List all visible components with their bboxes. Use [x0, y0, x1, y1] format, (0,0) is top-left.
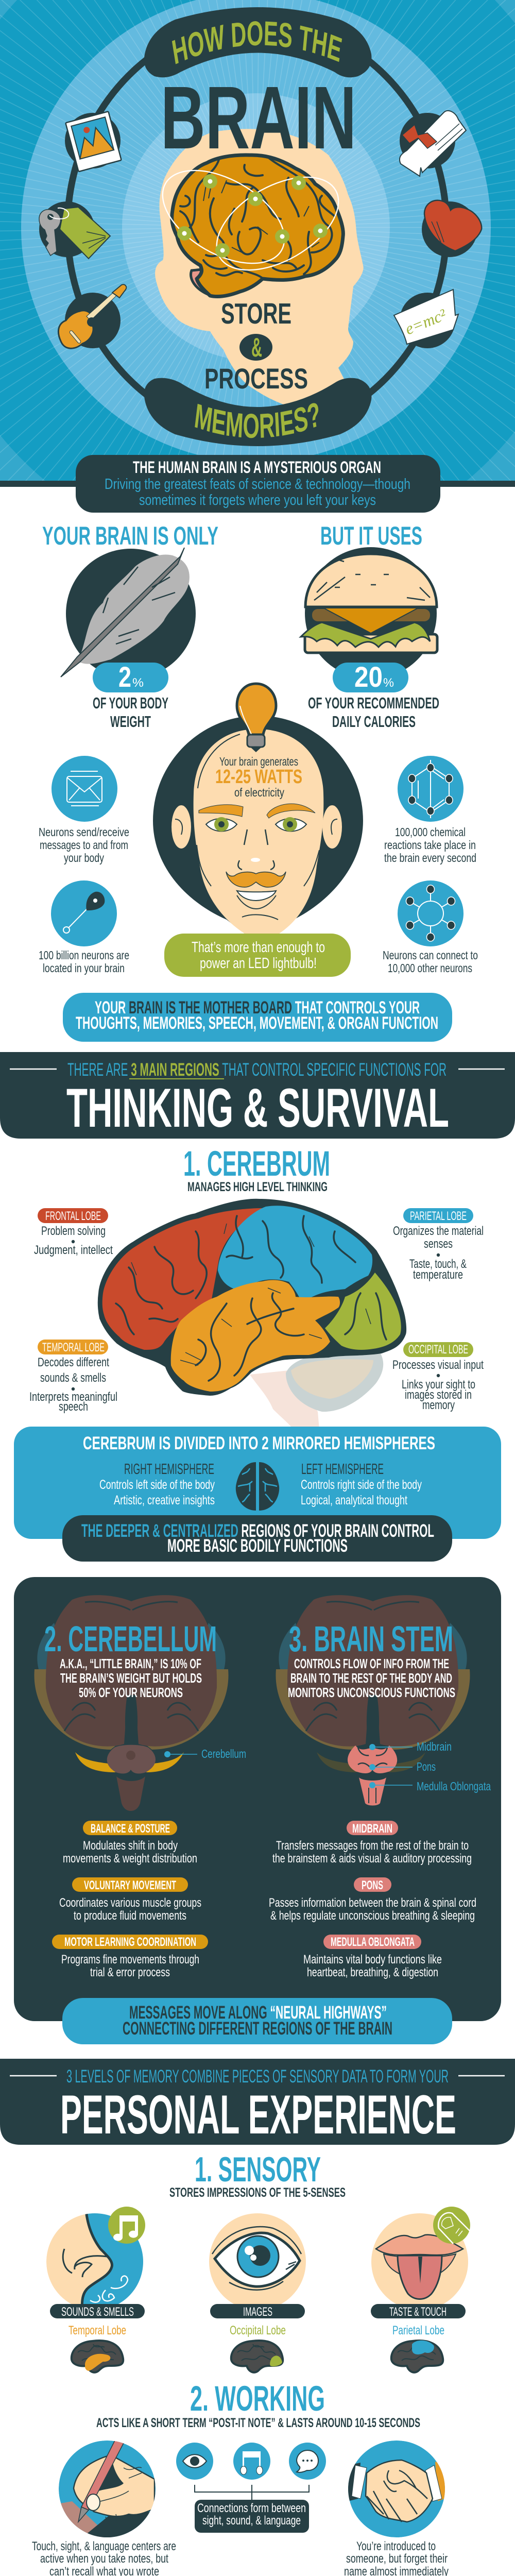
- stat: 20 percent: DAILY CALORIES: [332, 713, 416, 731]
- lobe note: parietal: Taste, touch, &: [409, 1257, 467, 1271]
- label: images: [210, 2304, 305, 2318]
- caption: introductions: [344, 2539, 449, 2576]
- badge: music note: [108, 2207, 145, 2244]
- heading: sensory: 1. SENSORY: [195, 2150, 321, 2189]
- callout: deeper regions: MORE BASIC BODILY FUNCTIONS: [167, 1536, 348, 1556]
- lobe note: temporal: [29, 1340, 117, 1414]
- fact: 100 billion neurons: 100 billion neurons are: [39, 948, 129, 962]
- function: pons: [269, 1877, 476, 1923]
- right hemisphere text: Controls left side of the body: [99, 1478, 215, 1492]
- function: balance and posture: BALANCE & POSTURE: [91, 1822, 170, 1836]
- fact: neurons send messages: Neurons send/receive: [39, 825, 129, 839]
- icon: speech bubble: [289, 2443, 326, 2480]
- lobe note: parietal: temperature: [413, 1268, 463, 1282]
- function: motor learning coordination: trial & error process: [90, 1965, 170, 1979]
- function: motor learning coordination: MOTOR LEARNING COORDINATION: [64, 1935, 196, 1949]
- cerebellum description: THE BRAIN’S WEIGHT BUT HOLDS: [60, 1670, 202, 1686]
- heading: cerebellum: 2. CEREBELLUM: [44, 1619, 217, 1659]
- panel: cerebellum and brain stem: [14, 1577, 501, 2021]
- caption: introductions: You’re introduced to: [356, 2539, 436, 2553]
- callout: mother board: [63, 993, 452, 1042]
- title: process: PROCESS: [204, 362, 308, 395]
- box: connections: sight, sound, & language: [202, 2514, 301, 2528]
- function: medulla oblongata: MEDULLA OBLONGATA: [331, 1935, 415, 1949]
- sense: sounds and smells: [46, 2207, 154, 2372]
- function: motor learning coordination: [52, 1935, 208, 1979]
- illustration: rear brain with brain stem: [276, 1595, 470, 1805]
- lobe note: temporal: Interprets meaningful: [29, 1390, 117, 1404]
- label: sounds and smells: [50, 2304, 145, 2318]
- hero background with rays: [0, 0, 515, 487]
- left hemisphere text: [301, 1461, 422, 1507]
- lobe note: parietal: Organizes the material: [393, 1224, 484, 1238]
- title: brain: BRAIN: [161, 67, 356, 167]
- title: store: STORE: [221, 297, 291, 330]
- sounds and smells text: SOUNDS & SMELLS: [61, 2305, 134, 2319]
- fact: chemical reactions: 100,000 chemical: [395, 825, 466, 839]
- left hemisphere text: Controls right side of the body: [301, 1478, 422, 1492]
- mustache: [226, 872, 286, 887]
- fact: 100 billion neurons: located in your brain: [43, 961, 125, 975]
- occipital lobe caption: Occipital Lobe: [230, 2324, 286, 2337]
- lobe folds: [116, 1216, 386, 1381]
- heading: working: [96, 2379, 420, 2430]
- temporal lobe: [171, 1280, 340, 1392]
- cerebellum description: [60, 1656, 202, 1700]
- labels: midbrain, pons, medulla: [369, 1740, 491, 1793]
- icon: eye: [176, 2443, 213, 2480]
- fact: 100 billion neurons: [39, 880, 129, 975]
- lobe note: parietal: [393, 1208, 484, 1282]
- function: motor learning coordination: Programs fine movements through: [61, 1953, 199, 1967]
- occipital lobe: [325, 1273, 401, 1350]
- heading: working: 2. WORKING: [190, 2379, 325, 2418]
- icon: feather: [61, 548, 196, 679]
- panel: hemispheres: [14, 1427, 501, 1539]
- eyes: [206, 817, 306, 832]
- function: voluntary movement: to produce fluid movements: [74, 1909, 186, 1923]
- mini brain: parietal: [391, 2341, 443, 2372]
- caption: note taking: Touch, sight, & language centers are: [32, 2539, 176, 2553]
- lobe note: temporal: TEMPORAL LOBE: [42, 1341, 105, 1354]
- right hemisphere text: RIGHT HEMISPHERE: [124, 1461, 214, 1478]
- title: memories: [195, 403, 318, 438]
- caption: note taking: [32, 2539, 176, 2576]
- lobe note: frontal: [34, 1208, 113, 1257]
- right hemisphere text: Artistic, creative insights: [114, 1493, 215, 1507]
- main brain illustration: [147, 151, 354, 297]
- icon: brain top view: [236, 1462, 279, 1511]
- watts text: of electricity: [234, 786, 284, 799]
- labels: midbrain, pons, medulla: Medulla Oblongata: [417, 1780, 491, 1793]
- badge: fingertip: [433, 2207, 470, 2244]
- callout: LED lightbulb: power an LED lightbulb!: [200, 955, 317, 972]
- function: balance and posture: movements & weight distribution: [63, 1852, 197, 1866]
- callout: deeper regions: [62, 1515, 452, 1562]
- left hemisphere text: LEFT HEMISPHERE: [301, 1461, 384, 1478]
- illustration: man with lightbulb: [153, 684, 363, 934]
- faded cerebellum and stem: [250, 1370, 319, 1430]
- brain stem description: [288, 1656, 455, 1700]
- fact: chemical reactions: [384, 756, 476, 865]
- section banner: personal experience: [0, 2059, 515, 2145]
- banner subtitle: sometimes it forgets where you left your keys: [139, 492, 376, 509]
- icon: diploma: [400, 111, 466, 176]
- label: cerebellum: Cerebellum: [201, 1747, 246, 1760]
- label: taste and touch: [371, 2304, 466, 2318]
- brain outline: [100, 1201, 404, 1393]
- caption: introductions: someone, but forget their: [346, 2552, 448, 2566]
- lobe note: frontal: Judgment, intellect: [34, 1243, 113, 1257]
- heading: cerebrum: MANAGES HIGH LEVEL THINKING: [187, 1180, 328, 1194]
- lobe note: occipital: OCCIPITAL LOBE: [408, 1343, 468, 1357]
- illustration: handshake: [348, 2441, 447, 2537]
- icon: equation paper: e=mc²: [402, 305, 450, 338]
- callout: LED lightbulb: [164, 934, 351, 977]
- illustration: rear brain with cerebellum: [34, 1595, 229, 1811]
- parietal lobe caption: Parietal Lobe: [392, 2324, 444, 2337]
- box: connections: [195, 2500, 309, 2533]
- fact: neuron connections: [383, 880, 478, 975]
- lobe note: parietal: senses: [424, 1237, 453, 1251]
- network nodes: [177, 174, 328, 258]
- heading: your brain is only: YOUR BRAIN IS ONLY: [42, 521, 218, 550]
- lobe note: temporal: sounds & smells: [40, 1371, 106, 1385]
- left hemisphere text: Logical, analytical thought: [301, 1493, 407, 1507]
- mini brain: occipital: [231, 2341, 283, 2372]
- illustration: colored brain lobes: [100, 1201, 404, 1430]
- lobe note: parietal: PARIETAL LOBE: [410, 1209, 467, 1223]
- lobe note: occipital: images stored in: [405, 1388, 472, 1402]
- banner subtitle: Driving the greatest feats of science & technology—though: [105, 476, 410, 493]
- stat: 2 percent: OF YOUR BODY: [93, 694, 168, 712]
- ampersand badge: [239, 333, 272, 363]
- watts text: [215, 755, 302, 799]
- lightbulb: [237, 684, 276, 752]
- heading: cerebrum: 1. CEREBRUM: [183, 1144, 330, 1183]
- stat: 20 percent: OF YOUR RECOMMENDED: [308, 694, 439, 712]
- heading: sensory: STORES IMPRESSIONS OF THE 5-SENSES: [169, 2185, 346, 2200]
- icon: key and tag: [39, 201, 110, 259]
- heading: but it uses: BUT IT USES: [320, 521, 422, 550]
- lobe note: occipital: Links your sight to: [402, 1378, 475, 1392]
- icon: photo: [65, 111, 122, 172]
- fact: neurons send messages: your body: [64, 851, 104, 865]
- taste and touch text: TASTE & TOUCH: [389, 2305, 447, 2319]
- cerebellum description: 50% OF YOUR NEURONS: [79, 1685, 183, 1700]
- heading: sensory: [169, 2150, 346, 2200]
- stat: 20 percent: 20: [354, 660, 383, 693]
- label: cerebellum: [164, 1747, 246, 1760]
- right hemisphere text: [99, 1461, 215, 1507]
- illustration: hand taking notes: [59, 2441, 156, 2537]
- function: voluntary movement: Coordinates various muscle groups: [59, 1896, 201, 1910]
- function: balance and posture: [63, 1821, 197, 1866]
- function: midbrain: MIDBRAIN: [352, 1822, 392, 1836]
- eyebrows: [199, 804, 315, 818]
- sense: images: [209, 2213, 306, 2372]
- stat: 2 percent: 2: [118, 660, 131, 693]
- neural network ellipses: [147, 151, 354, 289]
- parietal lobe: [218, 1206, 372, 1303]
- labels: midbrain, pons, medulla: Midbrain: [417, 1740, 452, 1753]
- bracket: [195, 2485, 309, 2500]
- function: balance and posture: Modulates shift in body: [83, 1839, 178, 1853]
- watts text: 12-25 WATTS: [215, 766, 302, 788]
- column: brain stem: [269, 1595, 491, 1979]
- temporal lobe caption: Temporal Lobe: [68, 2324, 126, 2337]
- intro banner: [76, 455, 440, 513]
- sense: taste and touch: [371, 2207, 470, 2372]
- function: voluntary movement: VOLUNTARY MOVEMENT: [84, 1878, 176, 1892]
- lobe note: occipital: [392, 1342, 484, 1412]
- fact: neuron connections: 10,000 other neurons: [388, 961, 472, 975]
- column: cerebellum: [34, 1595, 246, 1979]
- lobe note: occipital: memory: [422, 1398, 455, 1412]
- heading: cerebrum: [183, 1144, 330, 1194]
- title: how does the: HOW DOES THE: [172, 21, 342, 64]
- function: medulla oblongata: [303, 1935, 442, 1979]
- icon: burger: [301, 547, 437, 679]
- title: memories: MEMORIES?: [195, 403, 318, 438]
- callout: mother board: YOUR BRAIN IS THE MOTHER BOARD THAT CONTROLS YOUR: [95, 998, 420, 1018]
- callout: neural highways: [62, 1998, 452, 2044]
- watts text: Your brain generates: [219, 755, 298, 768]
- function: midbrain: [272, 1821, 472, 1866]
- fact: neuron connections: Neurons can connect to: [383, 948, 478, 962]
- function: medulla oblongata: heartbeat, breathing, & digestion: [307, 1965, 438, 1979]
- section banner: thinking and survival: [0, 1052, 515, 1139]
- function: medulla oblongata: Maintains vital body functions like: [303, 1953, 442, 1967]
- function: voluntary movement: [59, 1877, 201, 1923]
- icon: heart: [422, 200, 482, 257]
- stat: 2 percent: %: [132, 676, 144, 690]
- banner heading: THE HUMAN BRAIN IS A MYSTERIOUS ORGAN: [133, 458, 381, 477]
- lobe note: temporal: speech: [59, 1400, 88, 1414]
- callout: LED lightbulb: That’s more than enough to: [192, 939, 325, 956]
- lobe note: frontal: Problem solving: [41, 1224, 106, 1238]
- images text: IMAGES: [243, 2305, 272, 2319]
- lobe note: occipital: Processes visual input: [392, 1358, 484, 1372]
- labels: midbrain, pons, medulla: Pons: [417, 1760, 436, 1773]
- stat: 2 percent: [93, 660, 168, 731]
- mini brain: temporal: [72, 2341, 123, 2372]
- fact: neurons send messages: [39, 756, 129, 865]
- lobe note: temporal: Decodes different: [38, 1355, 109, 1369]
- top title plate: [144, 7, 371, 77]
- fact: neurons send messages: messages to and from: [40, 838, 128, 852]
- head silhouette: [155, 129, 364, 412]
- caption: note taking: active when you take notes, but: [40, 2552, 168, 2566]
- fact: chemical reactions: the brain every second: [384, 851, 476, 865]
- function: pons: PONS: [362, 1878, 383, 1892]
- callout: neural highways: MESSAGES MOVE ALONG “NEURAL HIGHWAYS”: [129, 2003, 387, 2023]
- stat: 2 percent: WEIGHT: [110, 713, 151, 731]
- ampersand badge: &: [251, 333, 262, 363]
- stat: 20 percent: %: [383, 676, 394, 690]
- lobe note: frontal: FRONTAL LOBE: [45, 1209, 101, 1223]
- box: connections: Connections form between: [197, 2501, 306, 2515]
- stat: 20 percent: [308, 660, 439, 731]
- icon: equation paper: [394, 290, 458, 348]
- frontal lobe: [102, 1208, 263, 1350]
- banner subtitle: [105, 476, 410, 509]
- title ring: [67, 7, 447, 446]
- icon: guitar: [58, 284, 126, 348]
- cerebellum description: A.K.A., “LITTLE BRAIN,” IS 10% OF: [60, 1656, 201, 1671]
- fact: chemical reactions: reactions take place in: [384, 838, 476, 852]
- icon: music note: [233, 2443, 270, 2480]
- bottom title plate: [144, 378, 371, 446]
